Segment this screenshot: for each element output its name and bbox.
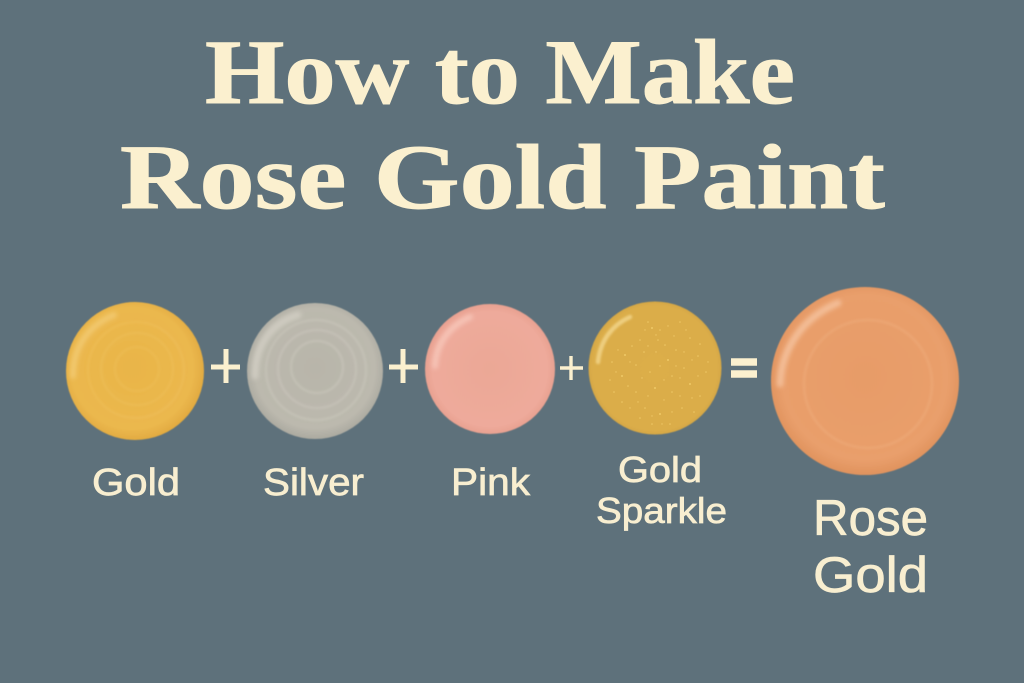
equals sign: [731, 362, 757, 374]
plus sign: [211, 349, 240, 383]
label: Gold Sparkle: Gold: [618, 449, 702, 490]
label: Gold: Gold: [92, 462, 180, 504]
label: Rose Gold: Gold: [813, 547, 928, 603]
title: [120, 21, 885, 228]
paint swatch: rose gold: [771, 287, 959, 475]
paint swatch: pink: [425, 304, 555, 434]
plus sign: [389, 349, 418, 383]
sparkle specks: [609, 321, 709, 425]
plus sign: [560, 356, 583, 380]
title: Rose Gold Paint: [120, 126, 885, 228]
label: Gold Sparkle: Sparkle: [596, 490, 727, 531]
label: Pink: Pink: [451, 462, 531, 504]
title: How to Make: [205, 21, 795, 123]
label: Rose Gold: Rose: [813, 490, 928, 546]
paint swatch: silver: [247, 303, 383, 439]
paint swatch: gold: [66, 302, 204, 440]
label: Silver: Silver: [263, 462, 364, 504]
label: Gold Sparkle: [596, 449, 727, 531]
paint swatch: gold sparkle: [588, 302, 722, 434]
label: Rose Gold: [813, 490, 928, 603]
